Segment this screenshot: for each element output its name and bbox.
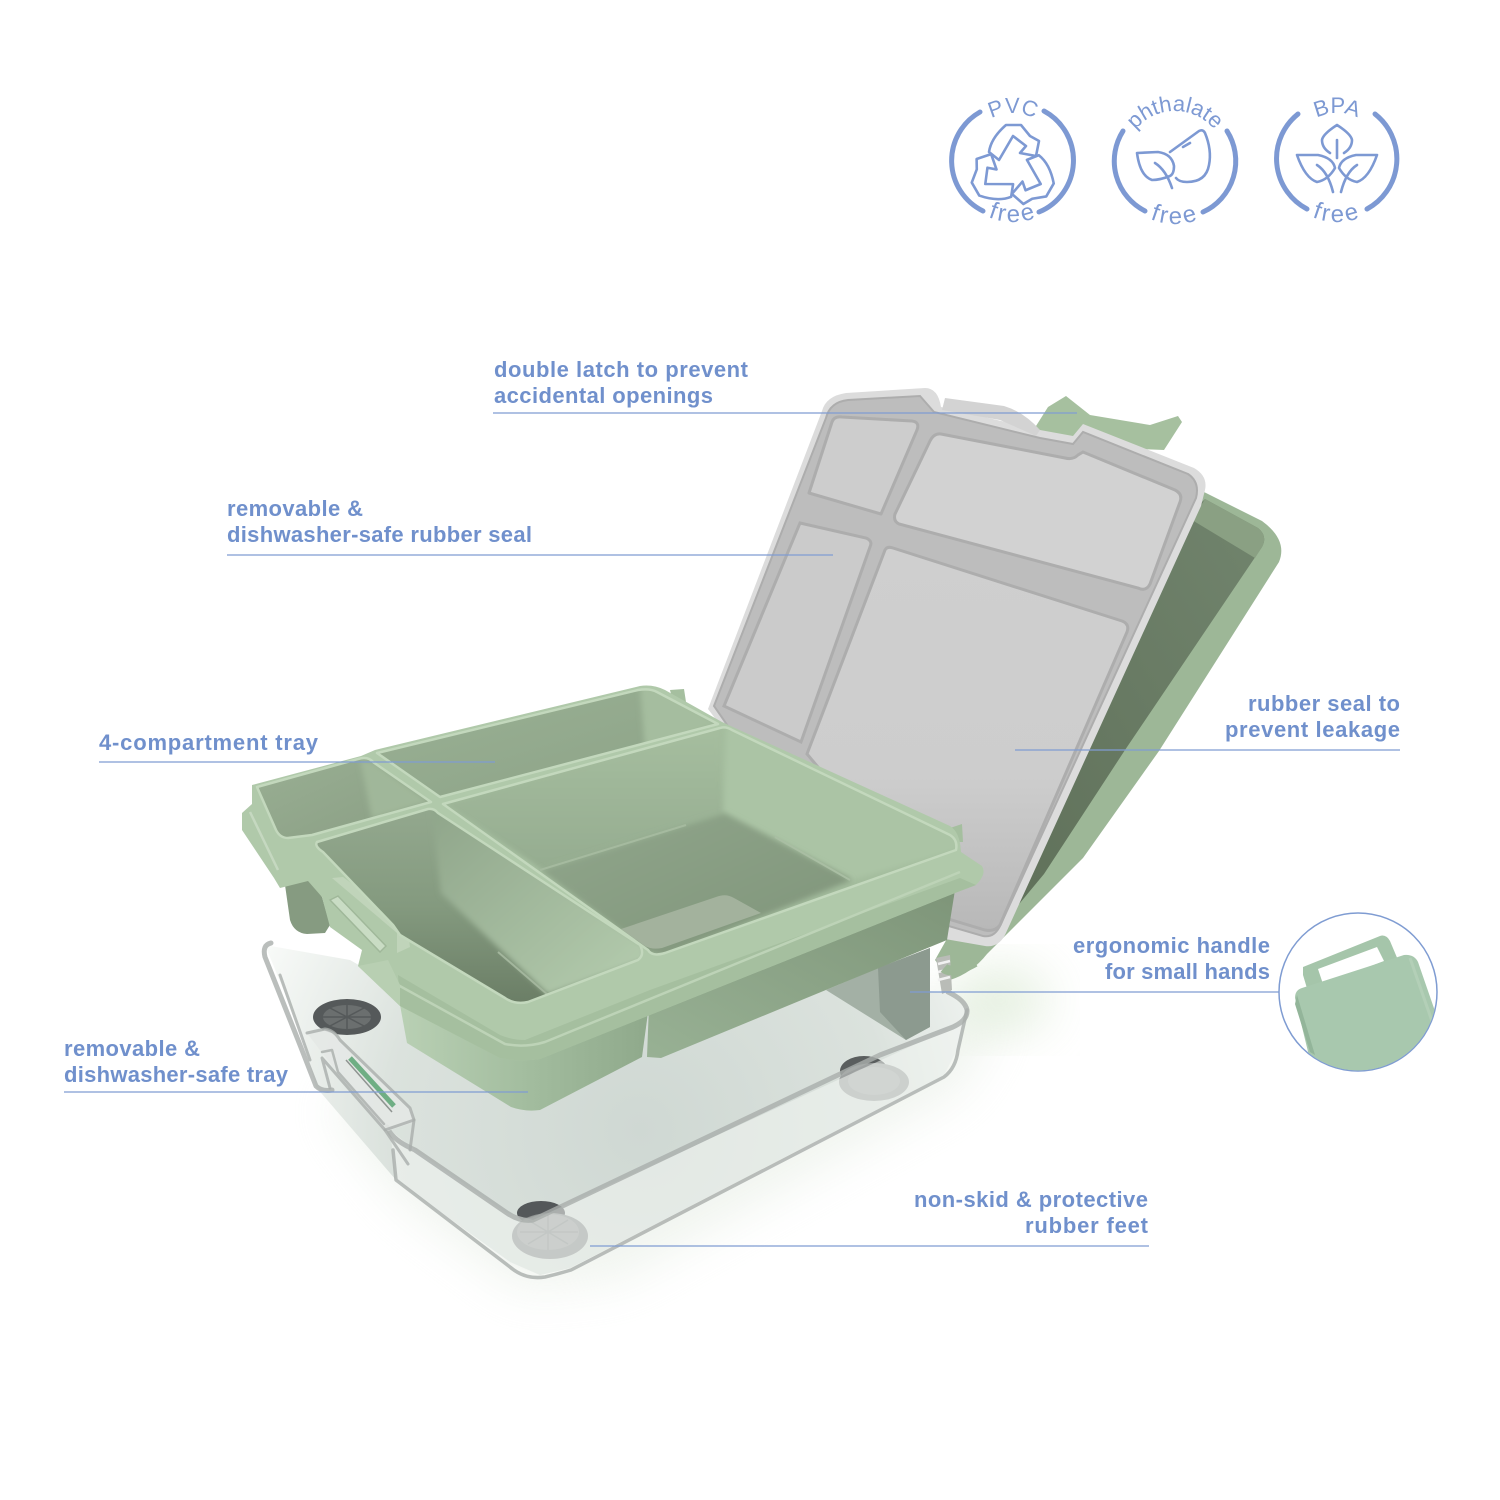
- callout: ergonomic handle: ergonomic handle: [1073, 933, 1270, 958]
- seal panel: large: [807, 547, 1128, 930]
- base handle: [307, 1029, 414, 1164]
- soft ground shadow: [330, 965, 1050, 1290]
- seal panel: top right: [894, 434, 1181, 589]
- flange tab: [358, 960, 400, 1006]
- callout: double latch: double latch to prevent: [494, 357, 749, 382]
- callout: 4-compartment tray: 4-compartment tray: [99, 730, 319, 755]
- callout: rubber feet: rubber feet: [1025, 1213, 1149, 1238]
- left bracket: [285, 880, 330, 934]
- compartment: large: [436, 725, 960, 956]
- four-compartment tray: [242, 685, 984, 1111]
- infographic canvas: [64, 96, 1438, 1286]
- clear base tray: [264, 943, 967, 1278]
- badge: BPA free: [1274, 98, 1400, 222]
- callout: rubber seal to prevent leakage: rubber seal to: [1248, 691, 1400, 716]
- compartment: back long: [377, 685, 722, 797]
- icon: three leaves: [1297, 125, 1377, 192]
- compartment: back left: [257, 758, 431, 838]
- callout: rubber seal to prevent leakage: [1015, 691, 1400, 750]
- open lid: [708, 388, 1281, 980]
- badge: PVC free: [949, 98, 1076, 222]
- inset: handle detail: [1278, 912, 1438, 1072]
- rubber foot: front: [512, 1201, 588, 1259]
- callout: removable seal: dishwasher-safe rubber seal: [227, 522, 532, 547]
- rubber foot: back left: [313, 999, 381, 1035]
- small tabs behind tray: [670, 689, 963, 842]
- lid outer shell: [935, 490, 1281, 980]
- rubber seal base: [708, 388, 1206, 946]
- callout: double latch: [493, 357, 1077, 413]
- lid hollow interior: [1000, 499, 1264, 925]
- tray body: front left box: [400, 1005, 649, 1111]
- callout: removable seal: removable &: [227, 496, 363, 521]
- icon: recycling arrows: [963, 125, 1062, 212]
- callout: rubber seal to prevent leakage: prevent leakage: [1225, 717, 1400, 742]
- raised floor panel: [621, 895, 761, 949]
- callout: removable tray: dishwasher-safe tray: [64, 1062, 289, 1087]
- callout: removable seal: [227, 496, 833, 555]
- base walls and rim: [264, 943, 967, 1278]
- tray rim and flange: [242, 686, 984, 1060]
- double latch: [942, 398, 1040, 436]
- callout: ergonomic handle: [910, 933, 1279, 992]
- callout: double latch: accidental openings: [494, 383, 713, 408]
- base floor: [265, 945, 967, 1275]
- rubber foot: back right: [839, 1056, 909, 1101]
- green latch behind lid: [1036, 396, 1182, 450]
- callout: ergonomic handle: for small hands: [1105, 959, 1270, 984]
- icon: leaf and drop: [1137, 130, 1210, 188]
- hinge support leg: [826, 948, 930, 1040]
- badge: phthalate free: phthalate: [1128, 96, 1220, 132]
- callout: removable tray: removable &: [64, 1036, 200, 1061]
- tray body: right: [647, 890, 955, 1058]
- left side latch: [332, 877, 410, 953]
- seal panel: lower left: [724, 523, 871, 742]
- badge: BPA free: BPA: [1314, 98, 1358, 118]
- callout: rubber feet: non-skid & protective: [914, 1187, 1148, 1212]
- box body: [1295, 954, 1434, 1070]
- callout: removable tray: [64, 1036, 528, 1092]
- badge: phthalate free: [1112, 96, 1238, 224]
- badge: PVC free: PVC: [988, 98, 1038, 118]
- callout: rubber feet: [590, 1187, 1149, 1246]
- hinge: [936, 955, 975, 994]
- badge: BPA free: free: [1314, 202, 1358, 222]
- handle: [1303, 936, 1397, 986]
- badge: PVC free: free: [990, 202, 1034, 222]
- badge: phthalate free: free: [1152, 204, 1196, 224]
- flange band: [398, 878, 976, 1060]
- compartment: front left: [316, 805, 645, 1003]
- seal panel: top left: [809, 417, 918, 514]
